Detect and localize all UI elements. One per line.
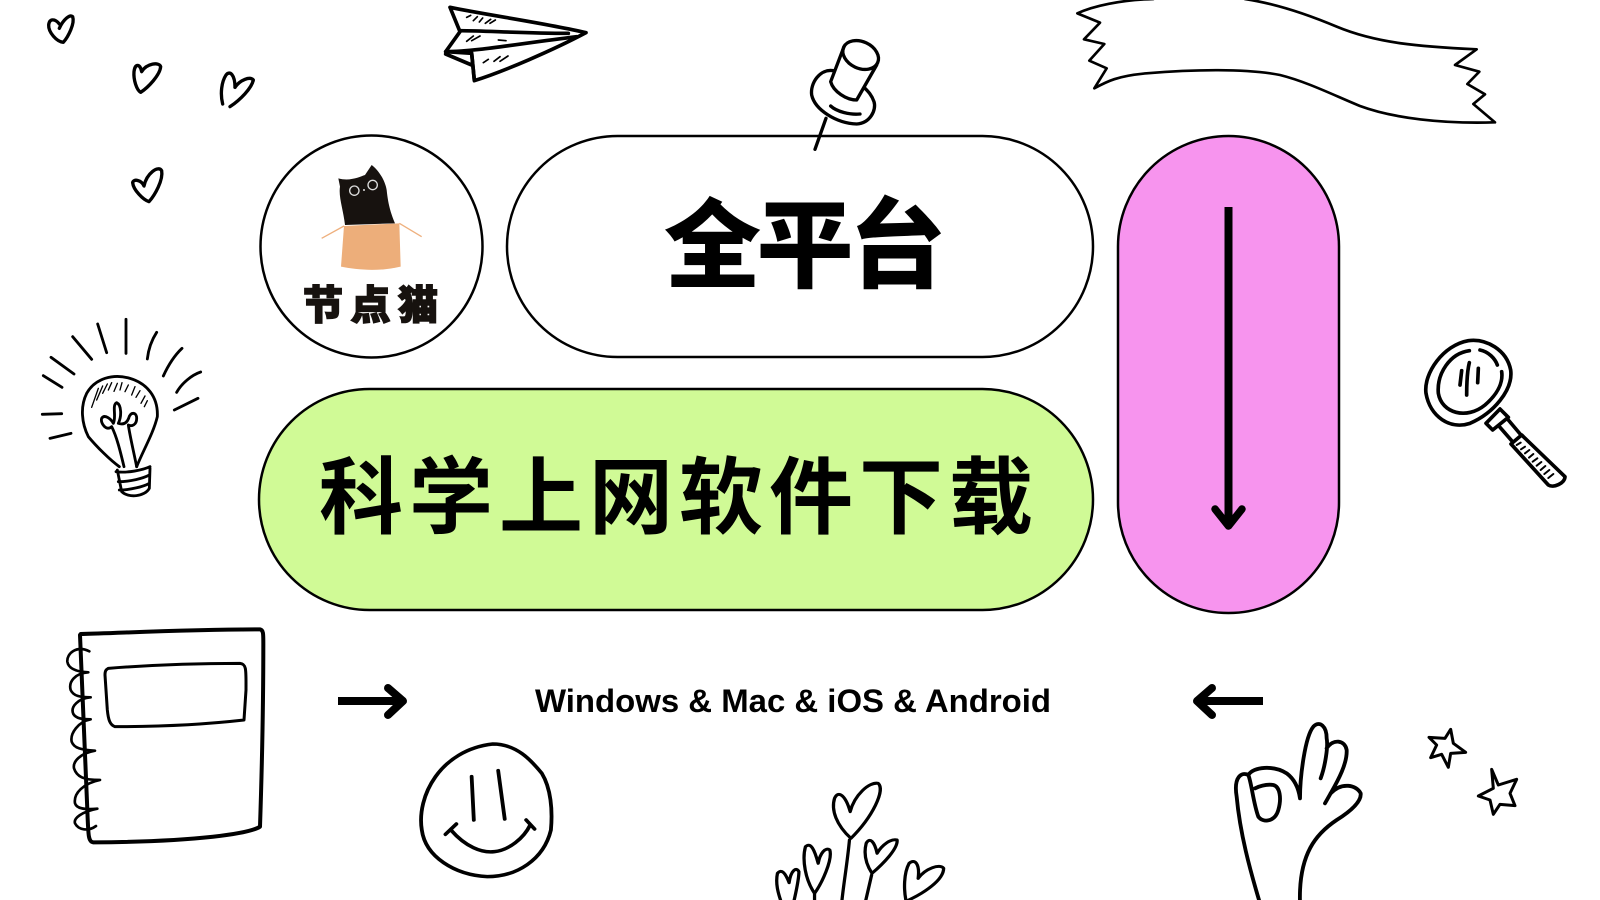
platforms text: Windows & Mac & iOS & Android — [535, 683, 1051, 719]
icon: hearts cluster — [49, 16, 253, 202]
icon: notebook — [67, 629, 263, 842]
heading: 科学上网软件下载: 科学上网软件下载 — [319, 451, 1033, 545]
arrow: right — [338, 688, 403, 715]
icon: light bulb — [42, 319, 201, 496]
icon: OK hand gesture — [1236, 724, 1361, 900]
icon: smiley face — [421, 744, 552, 877]
icon: paper plane — [446, 7, 586, 81]
panel: logo circle — [260, 136, 482, 358]
icon: ribbon banner — [1077, 0, 1495, 123]
arrow: left — [1197, 688, 1263, 715]
logo text: 节点猫 — [303, 284, 438, 328]
arrowhead: down — [1215, 509, 1242, 526]
icon: push pin — [811, 35, 883, 149]
icon: heart flowers — [777, 783, 944, 900]
icon: magnifying glass — [1426, 340, 1565, 486]
panel: white title pill — [507, 136, 1093, 357]
panel: green title pill — [259, 389, 1093, 610]
panel: pink arrow pill — [1118, 136, 1339, 613]
icon: cat in a box — [322, 165, 422, 270]
heading: 全平台: 全平台 — [664, 192, 946, 301]
icon: stars — [1429, 729, 1517, 814]
arrow: down — [1224, 207, 1232, 524]
